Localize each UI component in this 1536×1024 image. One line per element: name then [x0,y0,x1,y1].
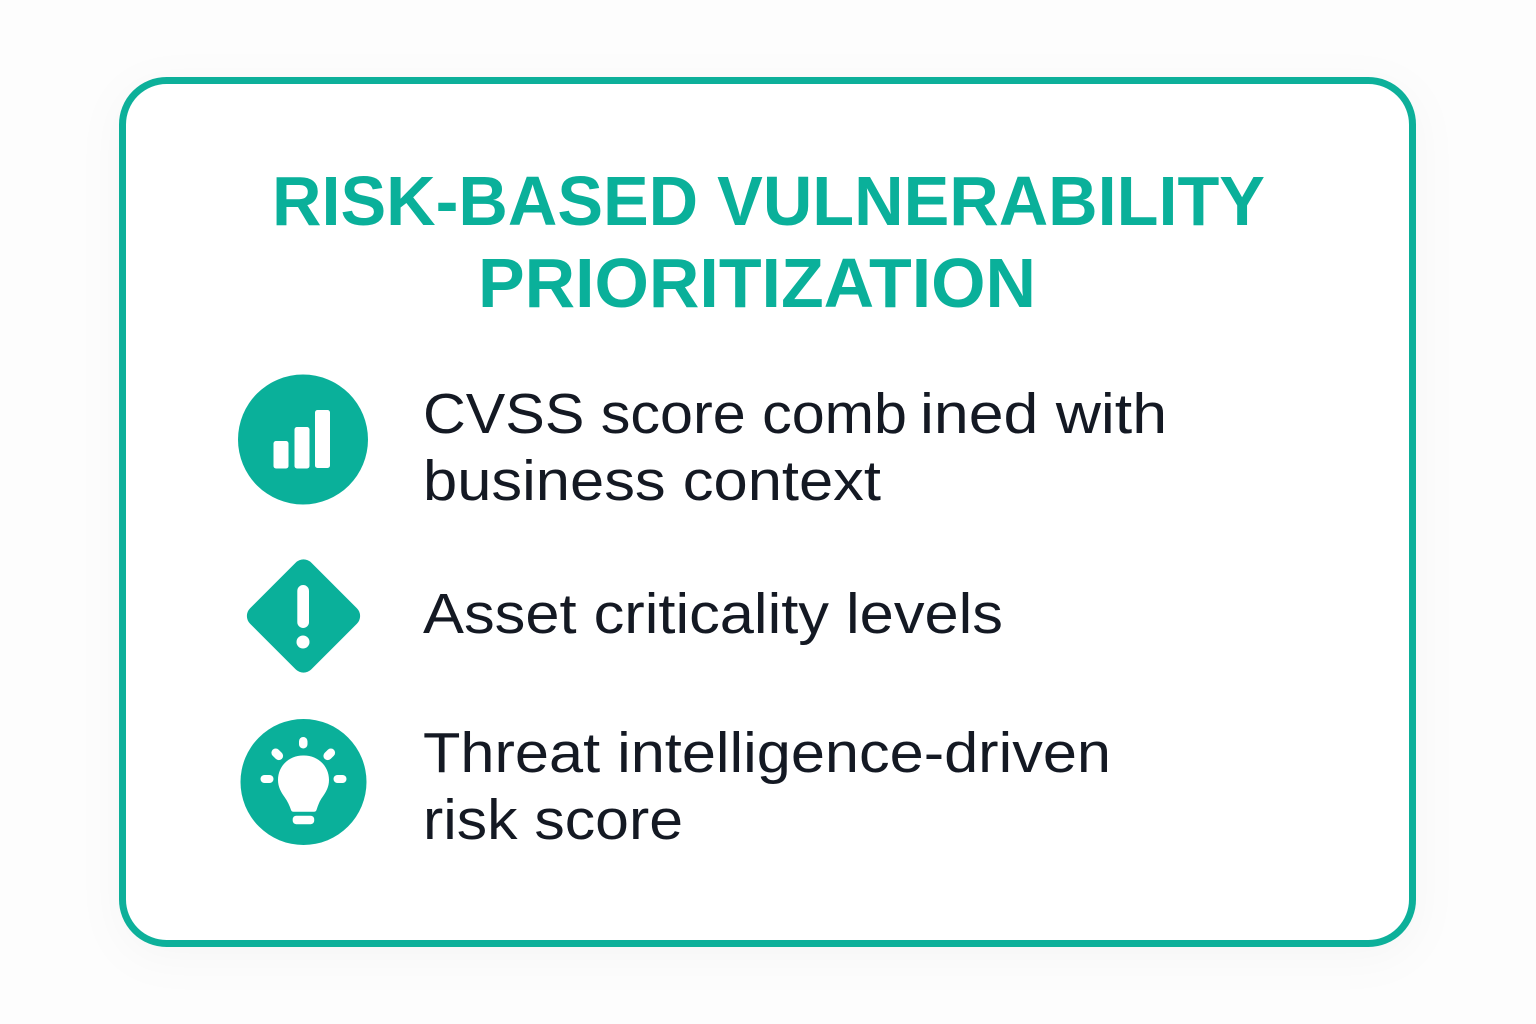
text: Threat intelligence-driven risk score: risk score [423,788,683,852]
panel: main card [122,80,1412,944]
icon: warning diamond [242,555,365,677]
title [272,162,1265,322]
text: CVSS score combined with business context [423,382,1167,513]
text: CVSS score combined with business context: CVSS score comb [423,382,907,446]
text: CVSS score combined with business context: business context [423,449,881,513]
title: PRIORITIZATION [478,244,1036,322]
text: Asset criticality levels: Asset criticality levels [423,582,1003,646]
text: Threat intelligence-driven risk score: Threat intelligence-driven [423,721,1111,785]
title: RISK-BASED VULNERABILITY [272,162,1265,240]
icon: bar chart in circle [238,374,368,504]
text: CVSS score combined with business context: ined with [920,382,1167,446]
text: Threat intelligence-driven risk score [423,721,1111,852]
icon: light bulb in circle [240,719,366,845]
